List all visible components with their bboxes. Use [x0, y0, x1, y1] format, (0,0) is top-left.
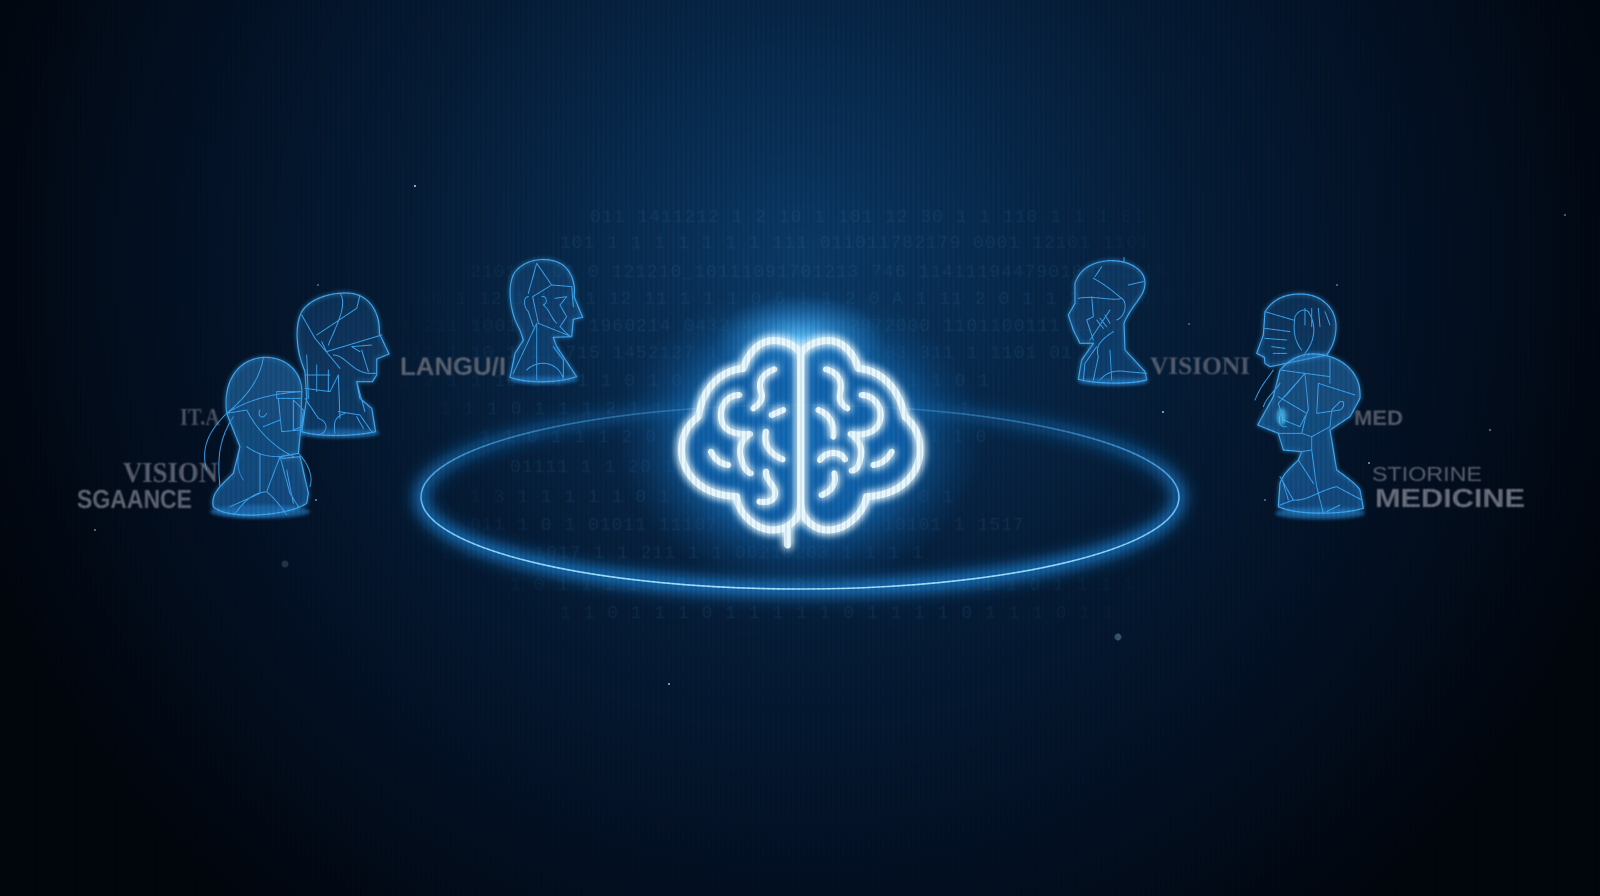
- binary data field: 1 2 1 1 10 1 1 1 1 0 1 0 1 1 1 0 1 2 0 1 1 1 1 0 1: [400, 372, 990, 392]
- floating particles: [94, 185, 1566, 685]
- binary data field: 101 1 1 1 1 1 1 1 111 011011782179 0001 12101 1101: [560, 234, 1150, 254]
- head wireframe: [227, 357, 303, 515]
- head outline: [1258, 354, 1363, 513]
- binary data field: [452, 210, 1110, 618]
- head: back right: [1257, 294, 1336, 367]
- base glow: [508, 376, 578, 384]
- head wireframe: [1078, 267, 1147, 380]
- binary data field: 1 1 1 0 1 1 1 2 1 1 1 1 1 1 0 1 1 1 2 0 0 1 1: [440, 400, 971, 420]
- hair strands: [205, 413, 311, 487]
- head: front right: [1255, 354, 1365, 519]
- ring glow: [421, 405, 1179, 589]
- base glow: [1275, 507, 1365, 519]
- head outline: [1257, 294, 1336, 367]
- binary data field: 1 0 1 1 1 1 1 0 1 1 1 1 0 1 1 1 1 2 1 0 1 1 0 1 1 1 1 1 0: [510, 576, 1183, 596]
- hair strands: [1255, 370, 1280, 407]
- binary data field: 1 211 1001 1741 1960214 0432 44501 1112972000 1101100111 21 1: [400, 317, 1120, 337]
- label: Medicine: MEDICINE: [1375, 483, 1525, 513]
- head: front left: [205, 357, 311, 518]
- label: Stiorine: STIORINE: [1372, 464, 1482, 486]
- icon: neon brain: [682, 341, 920, 545]
- brain neon lines: [682, 341, 920, 545]
- head: language: [508, 260, 583, 384]
- binary data field: 1 3 1 1 1 1 1 0 1 1 1 1 0 1 2 1 1 1 1 0 1: [470, 488, 954, 508]
- label: It.a: IT.A: [180, 405, 221, 431]
- head wireframe: [1265, 308, 1330, 353]
- head outline: [510, 260, 583, 382]
- antenna tip: [1122, 257, 1125, 262]
- binary data field: 01111 1 1 20 1 1112 1127 1 1 1: [510, 458, 864, 478]
- central orbit ring: [421, 405, 1179, 589]
- base glow: [1078, 378, 1148, 386]
- head wireframe: [302, 293, 382, 434]
- head outline: [297, 293, 389, 435]
- base glow: [210, 505, 310, 518]
- label: Vision right: VISIONI: [1150, 353, 1250, 380]
- binary data field: 2101 1 01 0 121210_10111091701213 746 1141119447901891 1210: [470, 263, 1166, 283]
- binary data field: 1 1 0 1 1 1 0 1 1 1 1 1 0 1 1 1 1 0 1 1 1 0 1 1: [560, 604, 1115, 624]
- binary data field: 1 101 1 1017 1 1 211 1 1 00210203 1 1 1 1: [440, 544, 924, 564]
- binary data field: 1 1 0 1 1 1 2 0 1 1 1 1 0 1 1 1 1 2 1 1 1 0: [480, 428, 987, 448]
- binary data field: 10 1 12 1 1 1 1 12 11 1 1 1 0 6 1 1 2 0 A 1 11 2 0 1 1 2 7 0 0 0 1 1 0 1 1 1: [420, 290, 1317, 310]
- label: Sgaance: SGAANCE: [77, 484, 192, 514]
- binary data field: 011 1 0 1 01011 11107 1 1 01010 11 10101 1 1517: [470, 516, 1025, 536]
- brain fill: [682, 341, 920, 530]
- label: Med: MED: [1354, 407, 1403, 430]
- label: Langu: LANGU/I: [400, 353, 506, 381]
- head outline: [1068, 261, 1147, 383]
- binary data field: 011 1411212 1 2 10 1 101 12 30 1 1 110 1 1 1 01: [590, 208, 1145, 228]
- bright visor spot: [1276, 408, 1287, 425]
- head outline: [213, 357, 308, 515]
- brain halo: [615, 282, 985, 592]
- base glow: [297, 429, 380, 438]
- label: Vision left: VISION: [123, 458, 218, 489]
- head wireframe: [1278, 358, 1362, 513]
- binary data field: 011 1 10 1 1 1715 1452127 1 1 0 1 11 267103 311 1 1101 01 1: [400, 344, 1096, 364]
- head: back left: [297, 293, 389, 438]
- head: vision right: [1068, 257, 1148, 386]
- head wireframe: [513, 263, 573, 380]
